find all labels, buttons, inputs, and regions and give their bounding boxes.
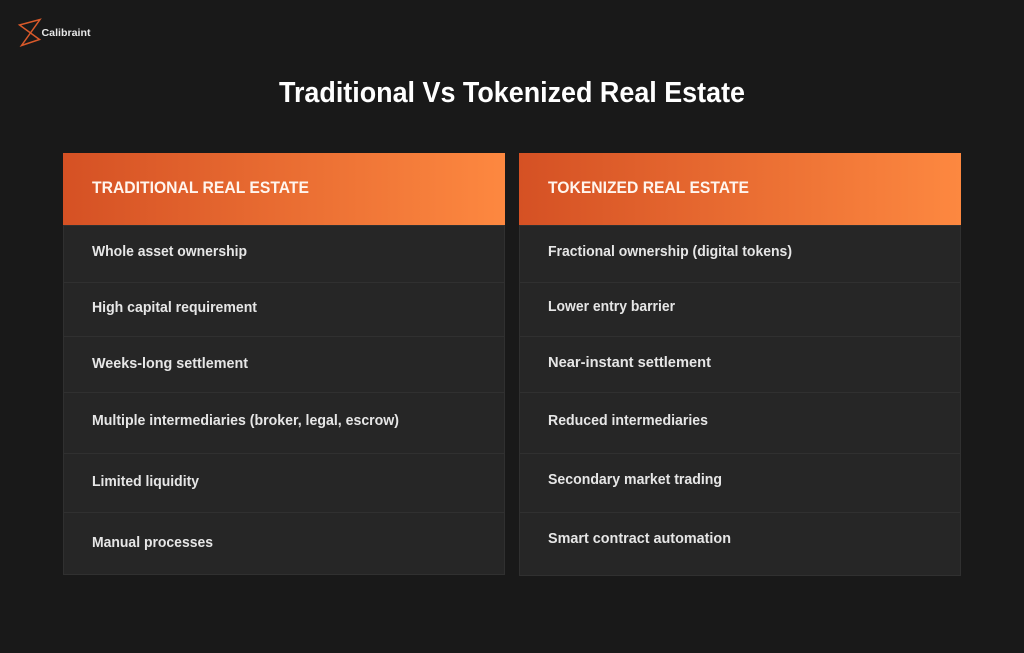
panel: traditional real estate <box>63 153 505 574</box>
logo wordmark: Calibraint <box>42 27 91 39</box>
row: fractional ownership: Fractional ownership (digital tokens) <box>548 244 792 260</box>
row: weeks-long settlement: Weeks-long settlement <box>92 356 248 372</box>
row: secondary market trading: Secondary market trading <box>548 472 722 488</box>
panel: tokenized real estate <box>519 153 961 576</box>
row: lower entry barrier: Lower entry barrier <box>548 299 675 315</box>
panel header <box>519 153 961 225</box>
row: manual processes: Manual processes <box>92 535 213 551</box>
panel background <box>520 226 960 576</box>
row: reduced intermediaries: Reduced intermediaries <box>548 413 708 429</box>
row: high capital requirement: High capital requirement <box>92 300 257 316</box>
row: multiple intermediaries: Multiple intermediaries (broker, legal, escrow) <box>92 413 399 429</box>
panel background <box>64 226 504 574</box>
row: near-instant settlement: Near-instant settlement <box>548 355 711 371</box>
row: smart contract automation: Smart contract automation <box>548 531 731 547</box>
logo <box>20 20 91 46</box>
icon: logo mark <box>20 20 40 46</box>
row: limited liquidity: Limited liquidity <box>92 474 199 490</box>
row: whole asset ownership: Whole asset ownership <box>92 244 247 260</box>
panel header: TOKENIZED REAL ESTATE <box>548 178 749 197</box>
panel header <box>63 153 505 225</box>
panel header: TRADITIONAL REAL ESTATE <box>92 178 309 197</box>
title: Traditional Vs Tokenized Real Estate <box>279 77 745 109</box>
